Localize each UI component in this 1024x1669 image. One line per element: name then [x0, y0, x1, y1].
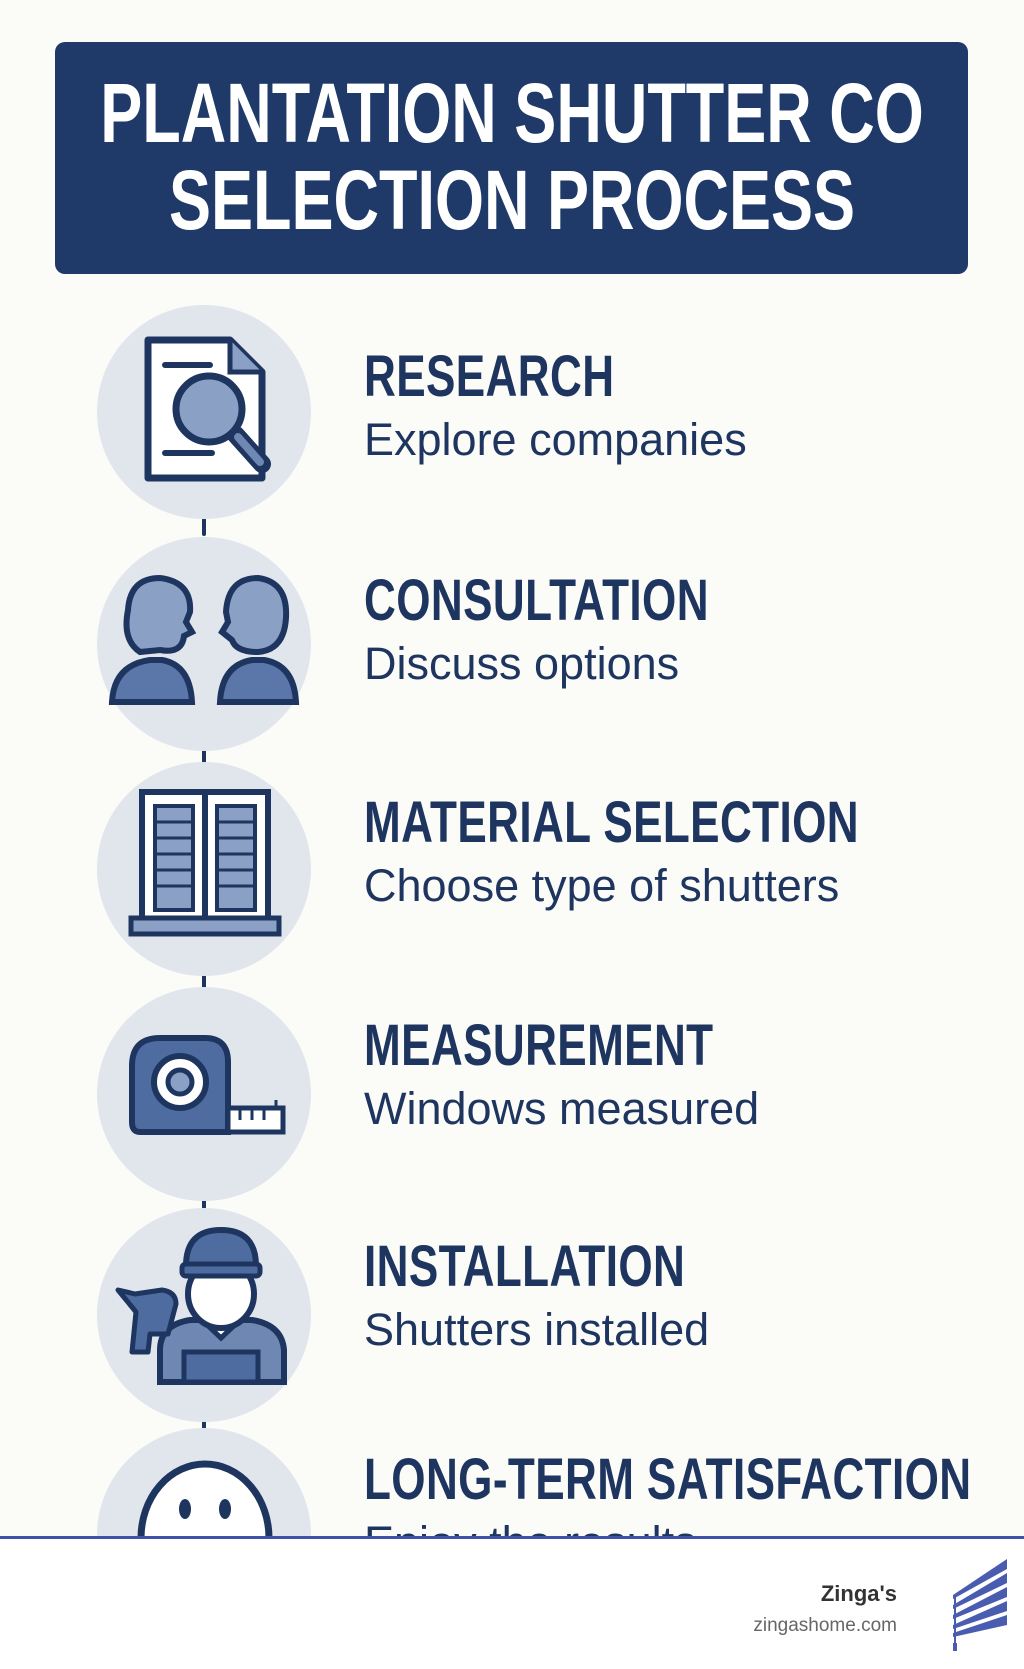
- brand text: [753, 1581, 897, 1636]
- step: research: Explore companies: [364, 414, 747, 465]
- step: long-term satisfaction: LONG-TERM SATISFACTION: [364, 1447, 971, 1512]
- step: measurement: [364, 1013, 759, 1134]
- step: measurement: MEASUREMENT: [364, 1013, 713, 1078]
- icon: installation: [97, 1208, 311, 1422]
- step: research: RESEARCH: [364, 344, 614, 409]
- step: material selection: MATERIAL SELECTION: [364, 790, 859, 855]
- title: PLANTATION SHUTTER CO: [100, 66, 923, 160]
- step: installation: [364, 1234, 709, 1355]
- step: installation: INSTALLATION: [364, 1234, 685, 1299]
- step: material selection: Choose type of shutters: [364, 860, 839, 911]
- icon: material selection: [97, 762, 311, 976]
- step: long-term satisfaction: [364, 1447, 971, 1568]
- logo: blinds: [953, 1559, 1007, 1651]
- step: installation: Shutters installed: [364, 1304, 709, 1355]
- step: consultation: [364, 568, 709, 689]
- brand text: Zinga's: [821, 1581, 897, 1606]
- title: SELECTION PROCESS: [168, 153, 855, 247]
- step: research: [364, 344, 747, 465]
- step: long-term satisfaction: Enjoy the results: [364, 1517, 697, 1568]
- brand text: zingashome.com: [753, 1615, 897, 1636]
- icon: research: [97, 305, 311, 519]
- timeline icons: [97, 305, 311, 1536]
- step: measurement: Windows measured: [364, 1083, 759, 1134]
- footer: [0, 1536, 1024, 1669]
- step: material selection: [364, 790, 859, 911]
- icon: satisfaction: [97, 1428, 311, 1642]
- step: consultation: CONSULTATION: [364, 568, 709, 633]
- title: [55, 42, 968, 274]
- icon: consultation: [97, 537, 311, 751]
- icon: measurement: [97, 987, 311, 1201]
- step: consultation: Discuss options: [364, 638, 679, 689]
